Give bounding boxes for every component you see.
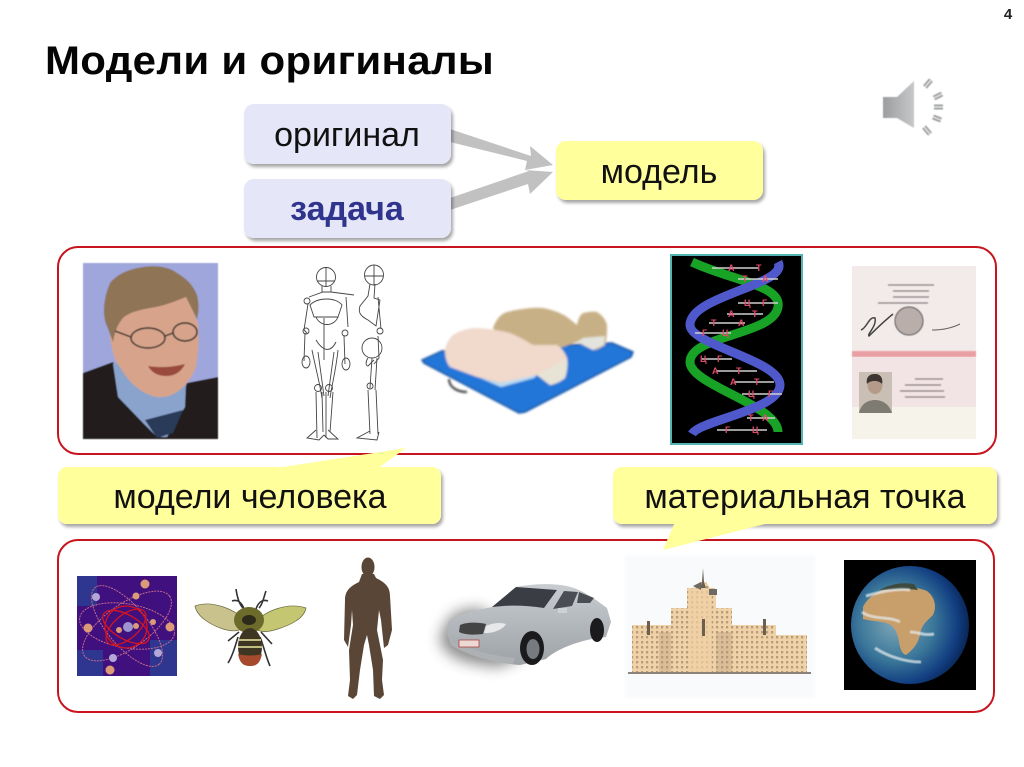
image: DNA double helix: Ц [748,389,755,399]
image: DNA double helix: А [728,263,735,273]
callout: human models [58,448,441,524]
callout: material point [613,467,997,550]
image: Earth [844,560,976,690]
image: DNA double helix: Г [768,389,773,399]
image: DNA double helix: Г [717,354,722,364]
title: Модели и оригиналы [45,38,494,83]
image: DNA double helix: А [762,274,769,284]
panel: objects [58,540,994,712]
photo: man portrait [83,263,218,439]
image: DNA double helix [671,255,802,444]
image: bee [195,589,306,666]
page number: 4 [1004,6,1013,23]
box: модель: модель [601,153,717,191]
image: DNA double helix: Ц [744,298,751,308]
image: DNA double helix: Т [756,263,762,273]
box: модель [556,141,763,200]
image: bronze human figure [344,558,392,699]
photo: CPR training mannequins [422,308,633,413]
box: оригинал [244,104,451,164]
image: DNA double helix: Г [702,328,707,338]
image: silver car [440,584,611,667]
front figure [302,267,354,440]
image: atom model [72,575,182,677]
image: DNA double helix: Т [736,366,742,376]
image: DNA double helix: Г [762,298,767,308]
image: DNA double helix: А [728,309,735,319]
image: DNA double helix: А [738,318,745,328]
arrows: original and task to model [450,129,553,210]
image: DNA double helix: Т [752,309,758,319]
panel: human models [58,247,996,454]
image: DNA double helix: А [730,377,737,387]
box: оригинал: оригинал [274,116,420,154]
side figure [357,265,384,440]
image: DNA double helix: Т [748,413,754,423]
image: DNA double helix: Г [725,425,730,435]
image: passport [852,266,976,439]
image: DNA double helix: Ц [700,354,707,364]
image: DNA double helix: Т [754,377,760,387]
box: задача [244,179,451,238]
box: задача: задача [290,190,405,228]
callout: human models: модели человека [113,478,387,516]
image: DNA double helix: Ц [752,425,759,435]
image: DNA double helix: А [762,413,769,423]
image: DNA double helix: Ц [722,328,729,338]
image: DNA double helix: Т [711,318,717,328]
drawing: skeleton figures [302,265,384,440]
callout: material point: материальная точка [644,478,966,516]
image: tower building [625,556,815,698]
image: DNA double helix: А [712,366,719,376]
icon: speaker [883,80,943,134]
image: DNA double helix: Т [742,274,748,284]
